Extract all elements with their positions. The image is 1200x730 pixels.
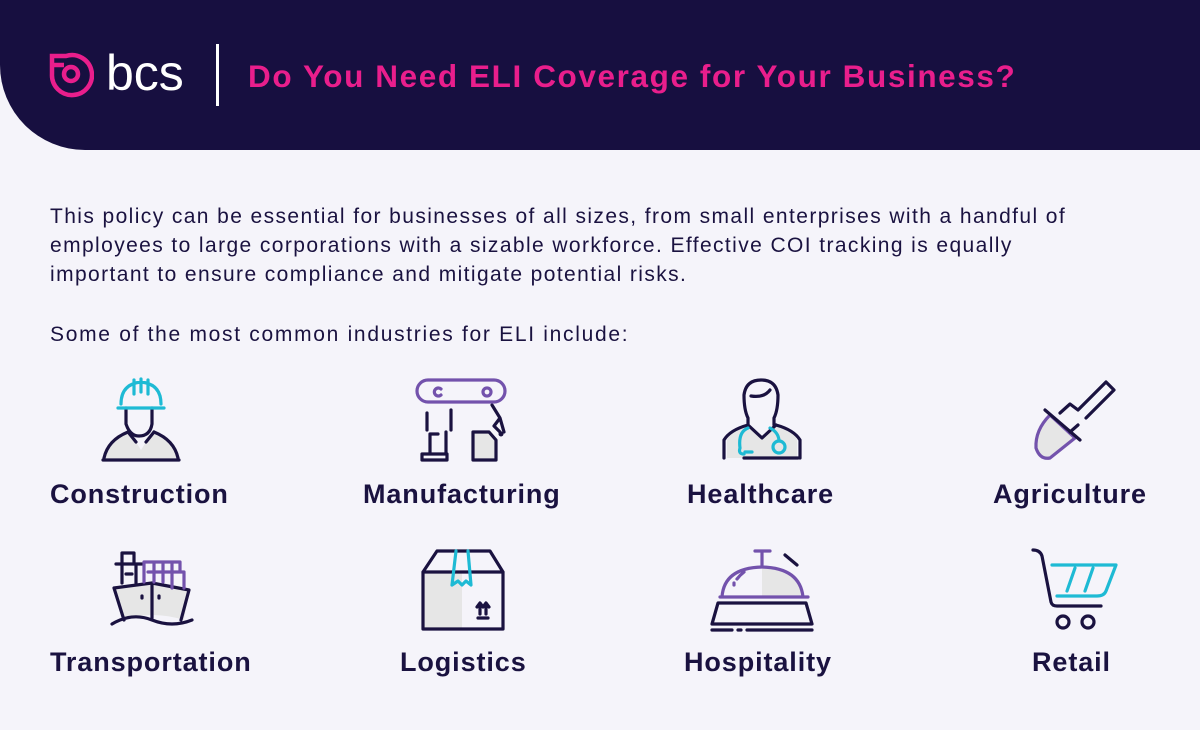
divider — [216, 44, 219, 106]
icon: construction worker — [103, 379, 179, 460]
intro paragraph: This policy can be essential for businesses of all sizes, from small enterprises with a handful of — [50, 205, 1066, 228]
header banner — [0, 0, 1200, 150]
label: Logistics: Logistics — [400, 647, 527, 677]
label: Transportation: Transportation — [50, 647, 252, 677]
icon: healthcare doctor — [724, 380, 800, 458]
intro paragraph: important to ensure compliance and mitigate potential risks. — [50, 263, 687, 286]
label: Agriculture: Agriculture — [993, 479, 1147, 509]
logo text: bcs — [106, 45, 184, 101]
label: Manufacturing: Manufacturing — [363, 479, 561, 509]
icon: agriculture trowel — [1036, 382, 1114, 458]
title: Do You Need ELI Coverage for Your Business? — [248, 58, 1016, 94]
intro paragraph: employees to large corporations with a sizable workforce. Effective COI tracking is equally — [50, 234, 1013, 257]
icon: hospitality bell — [712, 551, 812, 630]
icon: retail cart — [1033, 550, 1116, 628]
icon: logistics box — [423, 551, 503, 629]
label: Retail: Retail — [1032, 647, 1111, 677]
label: Healthcare: Healthcare — [687, 479, 834, 509]
industries lead-in: Some of the most common industries for ELI include: — [50, 323, 629, 346]
intro paragraph — [50, 205, 1066, 286]
label: Hospitality: Hospitality — [684, 647, 832, 677]
icon: manufacturing robot — [417, 380, 505, 460]
icon: transportation ship — [112, 553, 192, 624]
label: Construction: Construction — [50, 479, 229, 509]
logo icon — [50, 52, 94, 98]
